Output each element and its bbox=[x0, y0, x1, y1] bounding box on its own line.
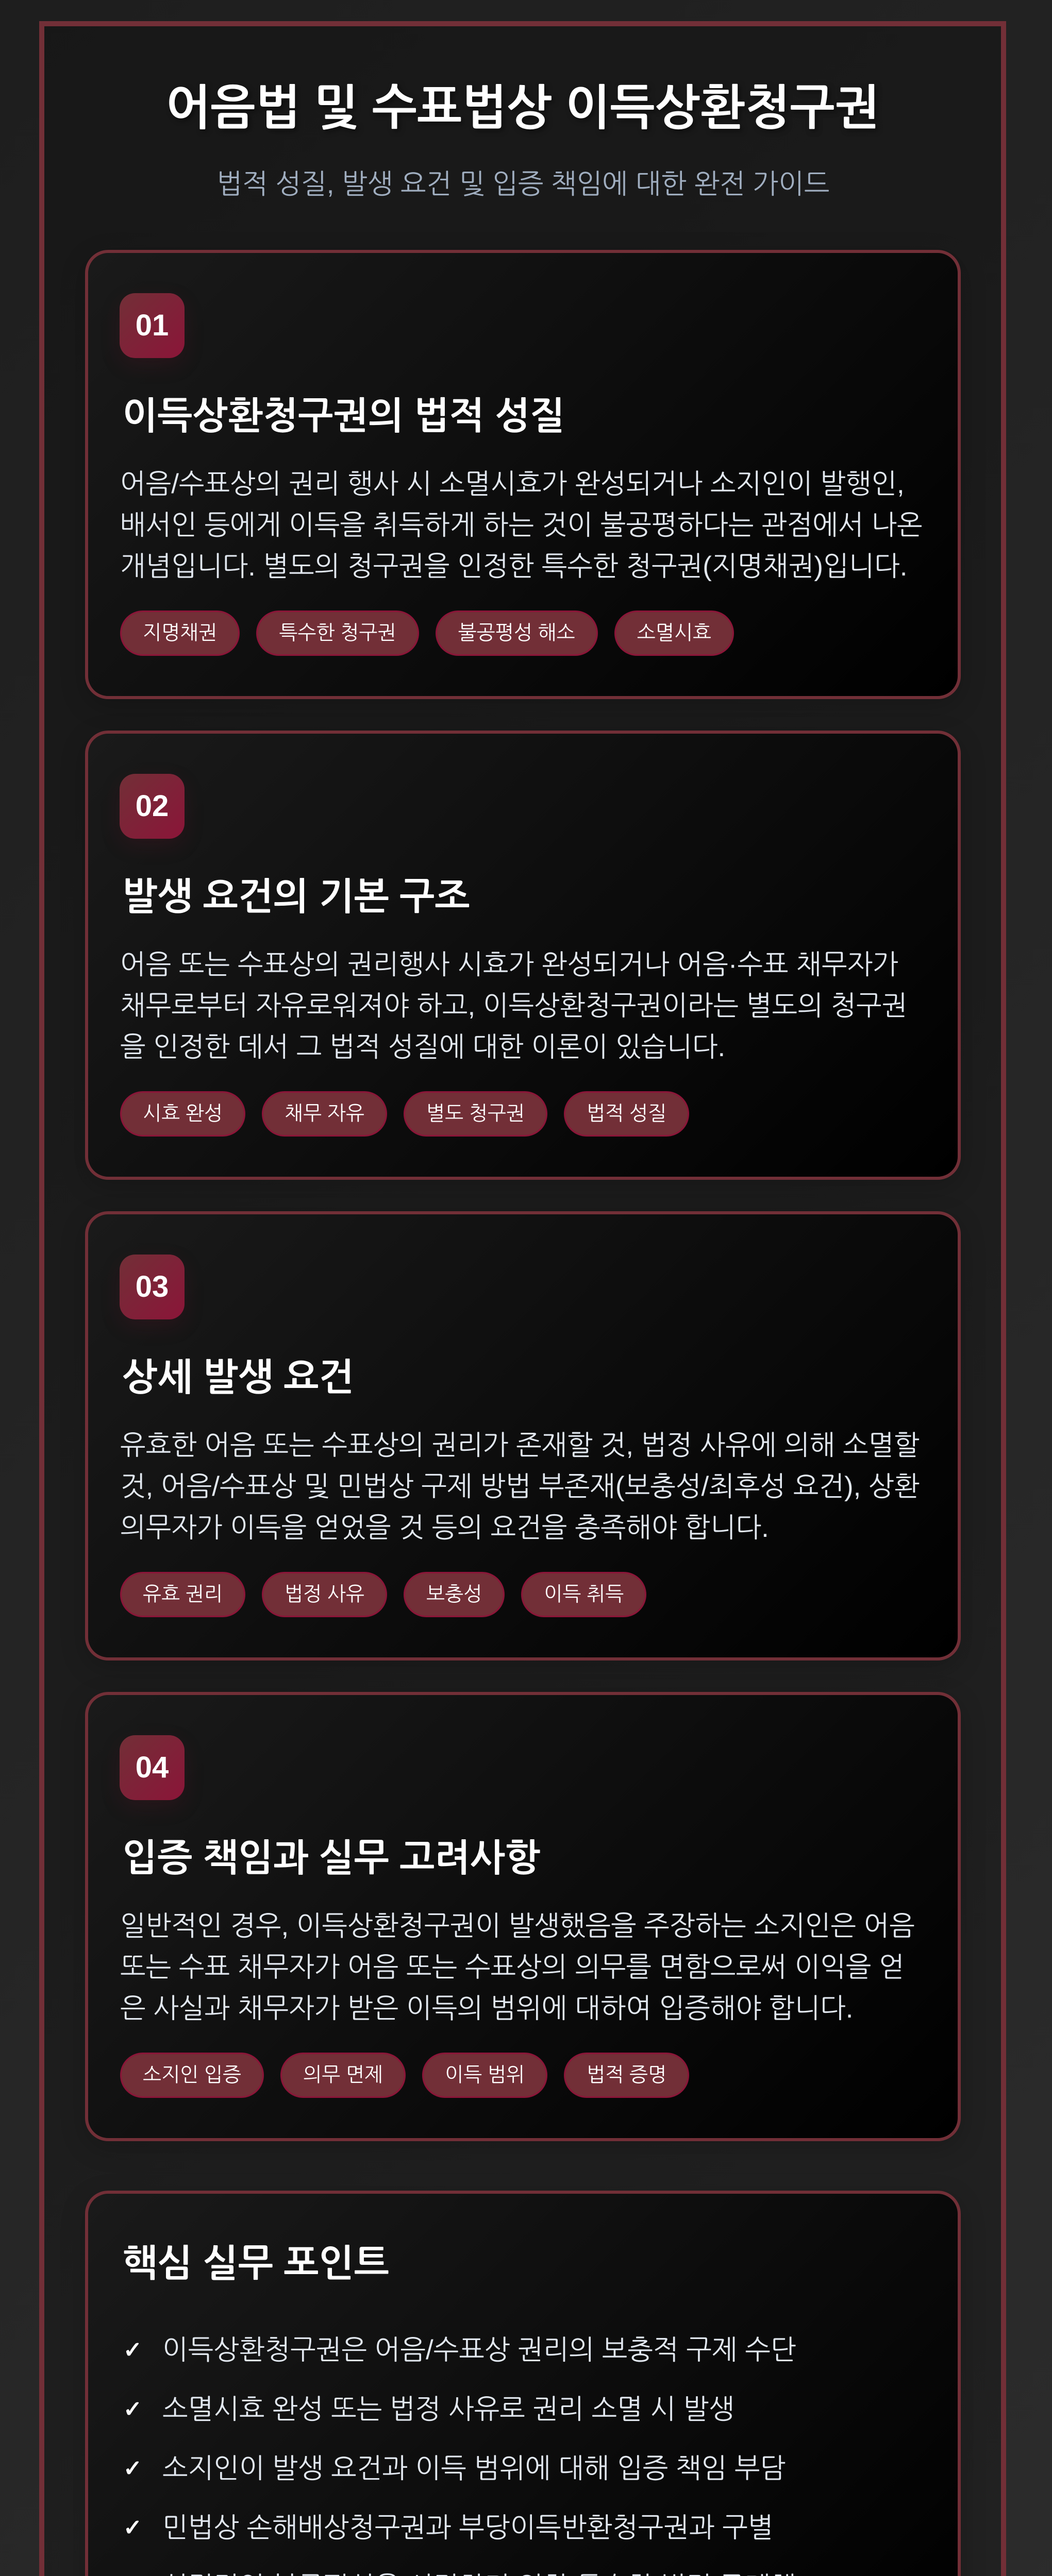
heading 04: 입증 책임과 실무 고려사항 bbox=[122, 1837, 540, 1879]
panel: key practical points: 민법상 손해배상청구권과 부당이득반환청구권과 구별 bbox=[162, 2513, 773, 2543]
text block 02: 어음 또는 수표상의 권리행사 시효가 완성되거나 어음·수표 채무자가 bbox=[120, 950, 898, 980]
panel: key practical points: 이득상환청구권은 어음/수표상 권리의 보충적 구제 수단 bbox=[162, 2335, 796, 2365]
tags 03: 이득 취득 bbox=[544, 1583, 624, 1605]
text block 01: 어음/수표상의 권리 행사 시 소멸시효가 완성되거나 소지인이 발행인, bbox=[120, 469, 905, 499]
tags 03: 유효 권리 bbox=[143, 1583, 223, 1605]
panel: key practical points: 소멸시효 완성 또는 법정 사유로 권리 소멸 시 발생 bbox=[162, 2394, 734, 2425]
tags 02: 채무 자유 bbox=[285, 1103, 364, 1125]
number badge 04: 04 bbox=[136, 1751, 169, 1784]
tags 04: 이득 범위 bbox=[445, 2064, 525, 2086]
panel: key practical points: ✓ bbox=[123, 2515, 142, 2540]
panel: key practical points: ✓ bbox=[123, 2456, 142, 2481]
checklist item 5 bbox=[123, 2572, 796, 2576]
panel: section 02 bbox=[85, 731, 961, 1180]
tags 01 bbox=[120, 611, 734, 656]
heading 03: 상세 발생 요건 bbox=[122, 1357, 354, 1398]
number badge 03 bbox=[120, 1255, 185, 1319]
text block 04: 일반적인 경우, 이득상환청구권이 발생했음을 주장하는 소지인은 어음 bbox=[120, 1911, 915, 1941]
tags 04: 소지인 입증 bbox=[143, 2064, 241, 2086]
summary heading: 핵심 실무 포인트 bbox=[122, 2243, 389, 2284]
text block 01: 배서인 등에게 이득을 취득하게 하는 것이 불공평하다는 관점에서 나온 bbox=[120, 510, 923, 540]
text block 02 bbox=[120, 950, 907, 1062]
tags 01: 불공평성 해소 bbox=[458, 622, 575, 644]
text block 04: 은 사실과 채무자가 받은 이득의 범위에 대하여 입증해야 합니다. bbox=[120, 1993, 853, 2024]
heading 02: 발생 요건의 기본 구조 bbox=[122, 876, 470, 918]
text block 01: 개념입니다. 별도의 청구권을 인정한 특수한 청구권(지명채권)입니다. bbox=[120, 551, 907, 582]
panel: section 03 bbox=[85, 1211, 961, 1660]
checklist item 2 bbox=[123, 2394, 734, 2425]
number badge 02 bbox=[120, 774, 185, 839]
text block 03: 의무자가 이득을 얻었을 것 등의 요건을 충족해야 합니다. bbox=[120, 1513, 769, 1543]
panel: section 01 bbox=[85, 250, 961, 699]
text block 04: 또는 수표 채무자가 어음 또는 수표상의 의무를 면함으로써 이익을 얻 bbox=[120, 1952, 905, 1982]
tags 02: 별도 청구권 bbox=[426, 1103, 525, 1125]
number badge 01: 01 bbox=[136, 309, 169, 342]
number badge 03: 03 bbox=[136, 1270, 169, 1303]
heading 01: 이득상환청구권의 법적 성질 bbox=[122, 395, 565, 437]
checklist item 3 bbox=[123, 2453, 786, 2484]
tags 03: 법정 사유 bbox=[285, 1583, 364, 1605]
panel: key practical points: ✓ bbox=[123, 2337, 142, 2363]
text block 02: 을 인정한 데서 그 법적 성질에 대한 이론이 있습니다. bbox=[120, 1032, 725, 1062]
tags 02: 시효 완성 bbox=[143, 1103, 223, 1125]
tags 01: 소멸시효 bbox=[637, 622, 711, 644]
tags 03: 보충성 bbox=[426, 1583, 482, 1605]
panel: key practical points: 소지인이 발생 요건과 이득 범위에 대해 입증 책임 부담 bbox=[162, 2453, 786, 2484]
checklist item 4 bbox=[123, 2513, 773, 2543]
tags 01: 특수한 청구권 bbox=[279, 622, 396, 644]
title: 어음법 및 수표법상 이득상환청구권 bbox=[165, 81, 880, 134]
checklist item 1 bbox=[123, 2335, 796, 2365]
text block 02: 채무로부터 자유로워져야 하고, 이득상환청구권이라는 별도의 청구권 bbox=[120, 991, 907, 1021]
number badge 02: 02 bbox=[136, 789, 169, 823]
tags 01: 지명채권 bbox=[143, 622, 217, 644]
text block 03: 것, 어음/수표상 및 민법상 구제 방법 부존재(보충성/최후성 요건), 상환 bbox=[120, 1471, 920, 1502]
tags 04: 의무 면제 bbox=[303, 2064, 383, 2086]
tags 02: 법적 성질 bbox=[587, 1103, 666, 1125]
text block 01 bbox=[120, 469, 923, 582]
number badge 04 bbox=[120, 1735, 185, 1800]
tags 04 bbox=[120, 2053, 689, 2098]
tags 03 bbox=[120, 1572, 646, 1617]
text block 03: 유효한 어음 또는 수표상의 권리가 존재할 것, 법정 사유에 의해 소멸할 bbox=[120, 1430, 920, 1461]
number badge 01 bbox=[120, 293, 185, 358]
subtitle: 법적 성질, 발생 요건 및 입증 책임에 대한 완전 가이드 bbox=[217, 169, 829, 199]
panel: section 04 bbox=[85, 1692, 961, 2141]
tags 02 bbox=[120, 1091, 689, 1137]
text block 04 bbox=[120, 1911, 915, 2024]
panel: key practical points bbox=[85, 2191, 961, 2576]
tags 04: 법적 증명 bbox=[587, 2064, 666, 2086]
panel: key practical points: ✓ bbox=[123, 2397, 142, 2422]
text block 03 bbox=[120, 1430, 920, 1543]
